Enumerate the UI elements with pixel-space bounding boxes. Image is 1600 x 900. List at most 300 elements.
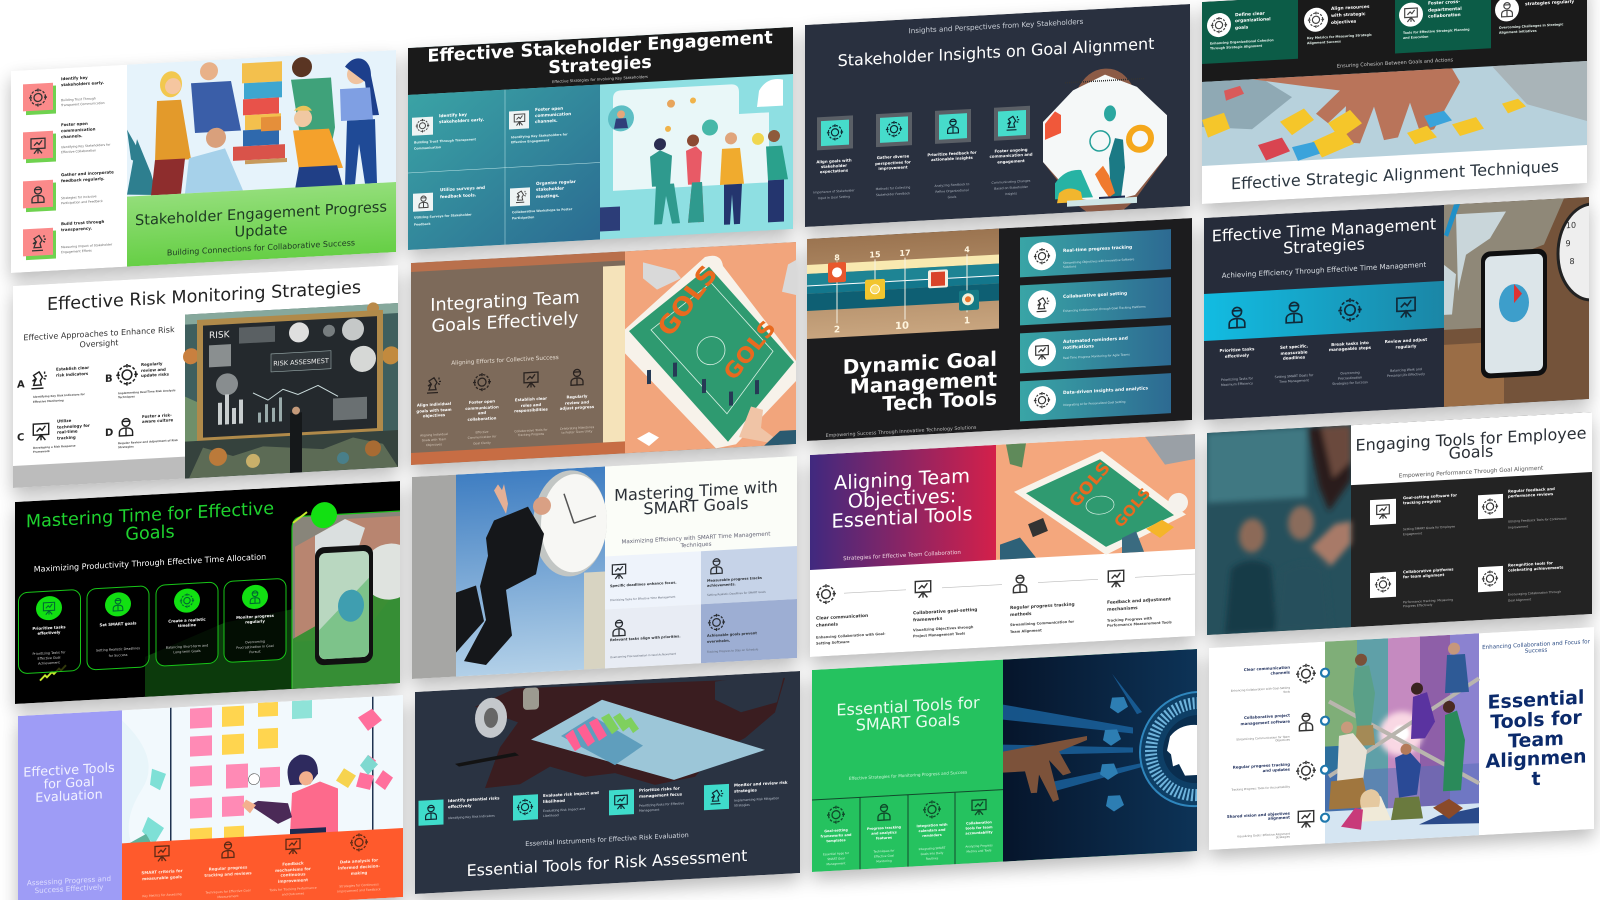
- teal item grid: Utilizing Surveys for Stakeholder: [414, 213, 472, 220]
- four columns: Time Management: [1278, 378, 1310, 384]
- four quadrants: overwhelm.: [707, 639, 730, 644]
- subtitle: Achieving Efficiency Through Effective Time Management: [1222, 260, 1426, 280]
- panel: Stakeholder Engagement Progress Update: [11, 50, 396, 273]
- four tool cards: Streamlining Objectives with Innovative Software: [1063, 257, 1134, 265]
- four risk tools: Strategies: [734, 803, 750, 808]
- panel: Integrating Team Goals Effectively: [411, 242, 796, 465]
- title: t: [1531, 768, 1541, 790]
- four goal columns: adjust progress: [560, 404, 595, 411]
- four risk tools: Identifying Key Risk Indicators: [448, 814, 495, 820]
- four outlined cards: [18, 578, 286, 674]
- four framed icons: Methods for Collecting: [876, 185, 910, 191]
- four columns: [1220, 337, 1427, 392]
- teal item grid: meetings.: [536, 193, 560, 199]
- four quadrants: Achievable goals prevent: [707, 631, 757, 638]
- four goal columns: Regularly: [567, 393, 588, 400]
- four tool cards: Integrating AI for Personalized Goal Setting: [1063, 400, 1126, 407]
- illustration: timeline on wood: 15: [869, 250, 881, 260]
- four goal columns: Communication for: [468, 434, 497, 440]
- four tool cards: Enhancing Collaboration through Goal Tracking Platforms: [1063, 305, 1146, 313]
- tools band: Techniques for Effective Goal: [205, 888, 251, 895]
- strategy columns: Define clear: [1235, 11, 1266, 18]
- four lettered items: B: [105, 374, 113, 385]
- list of four items: Engagement Efforts: [61, 249, 92, 254]
- illustration: timeline on wood: 4: [964, 245, 970, 254]
- left item list: Enhancing Collaboration with Goal-Setting: [1231, 686, 1290, 693]
- strategy columns: departmental: [1428, 6, 1462, 14]
- four tool columns: Tracking Progress with: [1107, 616, 1153, 623]
- four framed icons: engagement: [997, 158, 1025, 165]
- four lettered items: Implementing Real-Time Risk Analysis: [118, 388, 176, 395]
- four outlined cards: Procrastination in Goal: [236, 644, 274, 650]
- four framed icons: Gather diverse: [877, 153, 910, 160]
- four quadrants: [605, 546, 797, 668]
- four goal columns: Foster open: [469, 398, 495, 405]
- illustration: timeline on wood: [807, 229, 999, 339]
- teal item grid: Participation: [512, 215, 534, 220]
- footer: Empowering Success Through Innovative Technology Solutions: [826, 425, 977, 439]
- teal item grid: Collaborative Workshops to Foster: [512, 207, 573, 214]
- four outlined cards: Balancing Short-term and: [166, 643, 208, 650]
- left item list: and updates: [1263, 767, 1291, 773]
- four tool columns: [816, 564, 1195, 646]
- four framed icons: [813, 106, 1033, 207]
- title: Goals: [125, 522, 175, 545]
- four tool columns: accountability: [965, 830, 993, 836]
- title: Stakeholder Insights on Goal Alignment: [838, 34, 1154, 70]
- four goal columns: objectives: [423, 412, 446, 418]
- illustration: football pitch on desk: [996, 434, 1195, 561]
- four goal columns: collaboration: [468, 415, 497, 422]
- title: Effective Time Management: [1212, 214, 1436, 246]
- photo: phone and clock on wood: 9: [1565, 239, 1571, 248]
- four outlined cards: Pursuit: [249, 650, 261, 654]
- teal item grid: Identify key: [439, 112, 467, 118]
- left item list: Shared vision and objectives: [1227, 811, 1291, 819]
- four tool items: Recognition tools for: [1508, 560, 1553, 568]
- title: Tech Tools: [882, 386, 997, 416]
- title band: Effective Strategies for Involving Key Stakeholders: [552, 74, 648, 84]
- four goal columns: Establish clear: [515, 396, 547, 402]
- left item list: Tools: [1282, 690, 1291, 694]
- four columns: Overcoming: [1340, 371, 1360, 376]
- four tool items: Utilizing Feedback Tools for Continuous: [1508, 516, 1567, 524]
- panel: Essential Tools for Team Alignment: [1209, 627, 1594, 850]
- four risk tools: Implementing Risk Mitigation: [734, 796, 779, 803]
- list of four items: Foster open: [61, 121, 88, 127]
- four framed icons: Input in Goal Setting: [818, 195, 850, 200]
- four framed icons: Communicating Changes: [992, 179, 1031, 185]
- torn photo: analytics device: [455, 672, 785, 796]
- four lettered items: Developing a Risk Response: [33, 444, 76, 450]
- list of four items: Gather and incorporate: [61, 169, 114, 177]
- list of four items: transparency.: [61, 226, 92, 232]
- gradient title block: Aligning Team: [834, 464, 970, 495]
- four goal columns: Goals with Team: [422, 437, 446, 442]
- four goal columns: review and: [565, 399, 589, 406]
- list of four items: Build trust through: [61, 219, 104, 226]
- four quadrants: Measurable progress tracks: [707, 576, 762, 583]
- list of four items: Building Trust Through: [61, 96, 96, 102]
- list of four items: communication: [61, 126, 96, 133]
- illustration: timeline on wood: 10: [895, 320, 909, 332]
- strategy columns: Alignment Success: [1307, 39, 1341, 45]
- four tool columns: Streamlining Communication for: [1010, 620, 1074, 627]
- title: [1212, 214, 1436, 262]
- subtitle: Ensuring Cohesion Between Goals and Actions: [1337, 57, 1454, 70]
- tools band: Measurement: [217, 894, 239, 899]
- title band: [127, 182, 396, 267]
- four tool items: celebrating achievements: [1508, 565, 1564, 573]
- teal item grid: Identifying Key Stakeholders for: [511, 132, 568, 139]
- ring bullets: [1321, 668, 1329, 822]
- photo: man leaping beside clock: [456, 466, 607, 677]
- four columns: Maximum Efficiency: [1221, 381, 1253, 387]
- strategy columns: goals: [1235, 24, 1249, 31]
- four quadrants: Tracking Progress to Stay on Schedule: [706, 647, 759, 654]
- list of four items: Identify key: [61, 75, 88, 81]
- title: Tools for: [1490, 707, 1582, 734]
- four goal columns: communication: [465, 404, 499, 411]
- title block: Goals: [1449, 441, 1493, 463]
- four tool items: tracking progress: [1403, 498, 1442, 505]
- blurred photo: business people: [1207, 425, 1351, 635]
- tools band: and Outcomes: [282, 891, 305, 897]
- photo: phone and clock on wood: 8: [1569, 257, 1575, 266]
- panel: Effective Time Management Strategies: [1204, 195, 1600, 420]
- list of four items: channels.: [61, 133, 83, 139]
- four framed icons: Analyzing Feedback to: [935, 182, 970, 188]
- four lettered items: review and: [141, 367, 166, 373]
- four risk tools: strategies: [734, 787, 758, 794]
- four framed icons: Prioritize feedback for: [927, 150, 977, 157]
- panel: Effective Strategic Alignment Techniques: [1202, 0, 1587, 204]
- list of four items: Identifying Key Stakeholders for: [61, 143, 111, 149]
- four risk tools: Identify potential risks: [448, 795, 500, 803]
- four outlined cards: Monitor progress: [236, 613, 275, 620]
- four tool columns: calendars and: [919, 828, 946, 833]
- four lettered items: D: [105, 428, 113, 439]
- four tool columns: Management: [826, 861, 846, 866]
- tools band: Regular progress: [209, 864, 248, 872]
- list of four items: Transparent Communication: [60, 101, 105, 107]
- tools band: improvement: [278, 877, 308, 884]
- four goal columns: goals with team: [416, 407, 452, 414]
- subtitle: Aligning Efforts for Collective Success: [451, 355, 559, 367]
- four framed icons: Goals: [948, 195, 957, 199]
- four tool columns: Techniques for: [873, 848, 895, 854]
- four tool columns: [812, 790, 1003, 872]
- four tool columns: features: [876, 836, 892, 841]
- four goal columns: Tracking Progress: [517, 432, 545, 437]
- title block: Empowering Performance Through Goal Alignment: [1399, 466, 1544, 480]
- four goal columns: Effective: [475, 430, 489, 434]
- four tool columns: Monitoring: [876, 859, 892, 863]
- strategy columns: Key Metrics for Measuring Strategic: [1307, 33, 1372, 40]
- list of four items: feedback regularly.: [61, 176, 105, 183]
- subtitle: Effective Strategies for Monitoring Progress and Success: [849, 770, 967, 781]
- four quadrants: Prioritizing Tasks for Effective Time Management: [610, 595, 675, 602]
- left item list: Clear communication: [1244, 665, 1290, 672]
- strategy columns: Enhancing Organizational Cohesion: [1210, 38, 1274, 46]
- four tool columns: SMART Goal: [827, 856, 845, 861]
- four framed icons: Importance of Stakeholder: [813, 188, 855, 195]
- four tool cards: [1020, 229, 1171, 421]
- four tool columns: frameworks: [913, 616, 943, 623]
- four outlined cards: Achievement: [38, 661, 61, 666]
- four tool cards: Real-time progress tracking: [1063, 244, 1132, 254]
- four lettered items: [17, 360, 178, 455]
- panel: Essential Tools for SMART Goals: [812, 646, 1254, 872]
- four tool columns: Progress tracking: [867, 825, 902, 831]
- panel: Effective Tools for Goal Evaluation: [18, 695, 403, 900]
- illustration: sticky note wall: [122, 695, 403, 846]
- four goal columns: Collaborative Tools for: [514, 428, 548, 433]
- illustration: people shaking hands: [600, 78, 788, 232]
- strategy columns: Align resources: [1331, 4, 1370, 12]
- strategy columns: Foster cross-: [1428, 0, 1460, 7]
- title: Team: [1508, 728, 1564, 753]
- subtitle: [1482, 639, 1591, 657]
- four tool cards: Solutions: [1063, 264, 1077, 269]
- four risk tools: [418, 780, 788, 826]
- title: SMART Goals: [643, 494, 749, 518]
- title: [843, 347, 997, 418]
- four framed icons: perspectives for: [875, 159, 911, 166]
- title: Dynamic Goal: [843, 347, 997, 379]
- title: Essential Tools for Risk Assessment: [467, 846, 747, 880]
- four lettered items: Strategies: [118, 444, 134, 449]
- four columns: deadlines: [1283, 354, 1306, 361]
- four tool columns: Collaboration: [966, 820, 992, 826]
- four tool items: Setting SMART Goals for Employee: [1403, 524, 1455, 531]
- four tool columns: Visualizing Objectives through: [913, 625, 974, 632]
- four outlined cards: for Success: [109, 653, 128, 658]
- four tool items: [1370, 485, 1567, 610]
- four tool columns: Integrating SMART: [919, 846, 946, 851]
- four framed icons: expectations: [820, 168, 849, 174]
- strategy columns: Overcoming Challenges in Strategic: [1499, 22, 1564, 30]
- four tool columns: Integration with: [916, 823, 948, 828]
- four goal columns: Objectives: [426, 442, 442, 447]
- four tool items: Progress Effectively: [1403, 603, 1433, 608]
- teal item grid: Effective Engagement: [511, 138, 550, 144]
- four goal columns: Align individual: [417, 401, 451, 408]
- left item list: channels: [1270, 670, 1291, 676]
- title: [24, 762, 114, 802]
- panel: Essential Tools for Risk Assessment: [415, 671, 800, 894]
- four tool columns: templates: [826, 838, 846, 843]
- tools band: measurable goals: [142, 874, 183, 881]
- illustration: football pitch on desk: GOLS: [1065, 459, 1115, 511]
- left item list: Tracking Progress: Tools for Accountability: [1230, 785, 1290, 792]
- illustration: football pitch with goals: GOLS: [652, 260, 724, 342]
- four framed icons: actionable insights: [931, 155, 974, 162]
- four framed icons: Align goals with: [816, 157, 852, 164]
- strategy columns: [1202, 0, 1574, 64]
- subtitle: Success Effectively: [35, 882, 104, 895]
- strategy columns: collaboration: [1428, 12, 1461, 20]
- four lettered items: C: [17, 432, 24, 444]
- illustration: risk assessment chalkboard: RISK: [209, 330, 231, 341]
- panel: Effective Stakeholder Engagement Strategies: [408, 27, 793, 250]
- teal item grid: [408, 85, 600, 250]
- four lettered items: risk indicators: [56, 371, 89, 378]
- four lettered items: Framework: [33, 449, 50, 454]
- four outlined cards: Set SMART goals: [100, 620, 137, 627]
- photo: hand and digital head icon: [1003, 646, 1254, 862]
- four lettered items: Techniques: [118, 394, 135, 399]
- panel: Aligning Team Objectives: Essential Tools: [810, 434, 1195, 657]
- four tool columns: Effective Goal: [874, 854, 894, 859]
- four tool items: Encouraging Collaboration Through: [1508, 590, 1561, 597]
- teal item grid: Foster open: [535, 106, 563, 112]
- strategy columns: Through Strategic Alignment: [1210, 44, 1263, 51]
- subtitle: [27, 876, 110, 894]
- gradient title block: Essential Tools: [832, 502, 972, 533]
- teal item grid: Building Trust Through Transparent: [414, 137, 477, 145]
- four tool columns: Performance Measurement Tools: [1107, 620, 1172, 628]
- title: Strategies: [1283, 234, 1365, 258]
- illustration: timeline on wood: 17: [899, 248, 911, 258]
- strategy columns: organizational: [1235, 16, 1271, 24]
- four tool columns: and analytics: [871, 830, 897, 836]
- octagon illustration: [1043, 65, 1167, 220]
- list of four items: Measuring Impact of Stakeholder: [61, 242, 113, 249]
- four risk tools: Prioritize risks for: [639, 786, 680, 793]
- four risk tools: Management: [639, 808, 660, 813]
- title: Effective Strategic Alignment Techniques: [1231, 157, 1559, 193]
- four outlined cards: Overcoming: [245, 639, 265, 644]
- title block: Engaging Tools for Employee: [1356, 423, 1586, 455]
- four risk tools: effectively: [448, 803, 472, 809]
- four tool items: Collaborative platforms: [1403, 567, 1454, 574]
- gradient title block: Strategies for Effective Team Collaboration: [843, 550, 961, 562]
- four outlined cards: regularly: [245, 618, 265, 624]
- photo: phone and clock on wood: [1444, 195, 1600, 407]
- four tool cards: Real-Time Progress Monitoring for Agile Teams: [1063, 352, 1130, 360]
- four columns: measurable: [1280, 349, 1308, 356]
- four columns: Review and adjust: [1385, 337, 1427, 344]
- teal item grid: Communication: [414, 145, 441, 151]
- four tool columns: Setting Software: [816, 640, 850, 646]
- title: [836, 693, 980, 736]
- subtitle: Essential Instruments for Effective Risk Evaluation: [525, 831, 689, 848]
- four tool items: Engagement: [1403, 531, 1423, 536]
- four columns: Setting SMART Goals for: [1275, 373, 1314, 379]
- four tool items: Goal Alignment: [1508, 597, 1532, 603]
- panel: Mastering Time with SMART Goals: [412, 456, 797, 679]
- four tool items: Goal-setting software for: [1403, 492, 1457, 500]
- title: Alignmen: [1485, 745, 1587, 773]
- tools band: informed decision-: [338, 863, 380, 871]
- subheading: Effective Approaches to Enhance Risk: [23, 325, 175, 342]
- four tool columns: reminders: [922, 833, 942, 838]
- left item list: Regular progress tracking: [1233, 762, 1290, 770]
- four tool cards: Data-driven insights and analytics: [1063, 385, 1148, 396]
- illustration: football pitch with goals: GOLS: [719, 317, 781, 385]
- tools band: Improvement and Feedback: [337, 887, 381, 894]
- four lettered items: Regularly: [141, 361, 163, 367]
- four risk tools: Evaluating Risk Impact and: [543, 807, 585, 813]
- illustration: timeline on wood: 1: [964, 316, 970, 326]
- tools band: continuous: [281, 871, 306, 878]
- subtitle: Assessing Progress and: [27, 874, 111, 888]
- four risk tools: Monitor and review risk: [734, 780, 788, 788]
- four goal columns: to Foster Team Unity: [562, 429, 593, 435]
- four quadrants: Specific deadlines enhance focus.: [610, 581, 677, 588]
- title: Mastering Time with: [614, 477, 778, 505]
- four lettered items: Effective Monitoring: [33, 398, 64, 404]
- gradient title block: [810, 445, 996, 570]
- four tool columns: Collaborative goal-setting: [913, 607, 977, 616]
- four tool items: for team alignment: [1403, 572, 1444, 579]
- subheading: Oversight: [80, 338, 118, 349]
- title: SMART Goals: [856, 710, 960, 735]
- illustration: risk assessment chalkboard: [183, 301, 400, 479]
- tools band: tracking and reviews: [204, 870, 252, 878]
- strategy columns: Tools for Effective Strategic Planning: [1403, 27, 1470, 35]
- four tool items: Improvement: [1508, 524, 1529, 530]
- title: Integrating Team: [430, 288, 580, 316]
- subtitle: Maximizing Efficiency with SMART Time Management: [622, 531, 771, 546]
- four tool items: performance reviews: [1508, 491, 1554, 499]
- photo: hands arranging sticky notes: [1202, 61, 1587, 166]
- four lettered items: Identifying Key Risk Indicators for: [33, 392, 85, 399]
- four tool columns: Routines: [926, 856, 939, 861]
- title: Management: [850, 367, 997, 399]
- title block: [1351, 412, 1592, 485]
- strategy columns: and Execution: [1403, 35, 1429, 40]
- four columns: effectively: [1225, 353, 1249, 359]
- list of four items: stakeholders early.: [61, 80, 105, 87]
- four lettered items: Utilize: [57, 418, 72, 424]
- subtitle: Enhancing Collaboration and Focus for: [1482, 639, 1591, 651]
- title: Essential: [1488, 687, 1584, 714]
- illustration: football pitch with goals: [625, 242, 796, 453]
- list of four items: Strategies for Inclusive: [61, 194, 97, 200]
- phone image: [291, 502, 400, 689]
- four tool items: Performance Tracking: Measuring: [1403, 598, 1453, 604]
- title band: Stakeholder Engagement Progress: [135, 199, 387, 229]
- four columns: Procrastination: [1338, 375, 1362, 381]
- four columns: Prioritizing Tasks for: [1221, 376, 1254, 382]
- title: Effective Tools: [23, 761, 115, 781]
- illustration: team connected with ropes: [1325, 633, 1479, 844]
- title: Essential Tools for: [836, 693, 980, 720]
- four lettered items: update risks: [141, 371, 170, 378]
- four outlined cards: Create a realistic: [168, 617, 206, 624]
- left item list: Collaborative project: [1244, 713, 1290, 720]
- tools band: making: [351, 870, 367, 876]
- four tool columns: Essential Apps for: [823, 851, 850, 856]
- four goal columns: responsibilities: [514, 407, 549, 413]
- four lettered items: Regular Review and Adjustment of Risk: [118, 438, 178, 445]
- four columns: Set specific,: [1280, 343, 1308, 350]
- left item list: Visualizing Goals: Effective Alignment: [1237, 832, 1291, 838]
- tools band: Key Metrics for Assessing: [142, 892, 182, 898]
- four tool columns: channels: [816, 621, 838, 629]
- left item list: [1227, 663, 1316, 842]
- four tool columns: Team Alignment: [1010, 628, 1042, 634]
- four goal columns: Celebrating Milestones: [560, 425, 595, 431]
- four tool cards: notifications: [1063, 343, 1094, 351]
- four lettered items: Foster a risk-: [142, 412, 172, 419]
- illustration: timeline on wood: 8: [834, 253, 840, 263]
- tools band: SMART criteria for: [141, 868, 183, 875]
- teal item grid: stakeholders early.: [439, 117, 484, 124]
- title: [616, 480, 776, 514]
